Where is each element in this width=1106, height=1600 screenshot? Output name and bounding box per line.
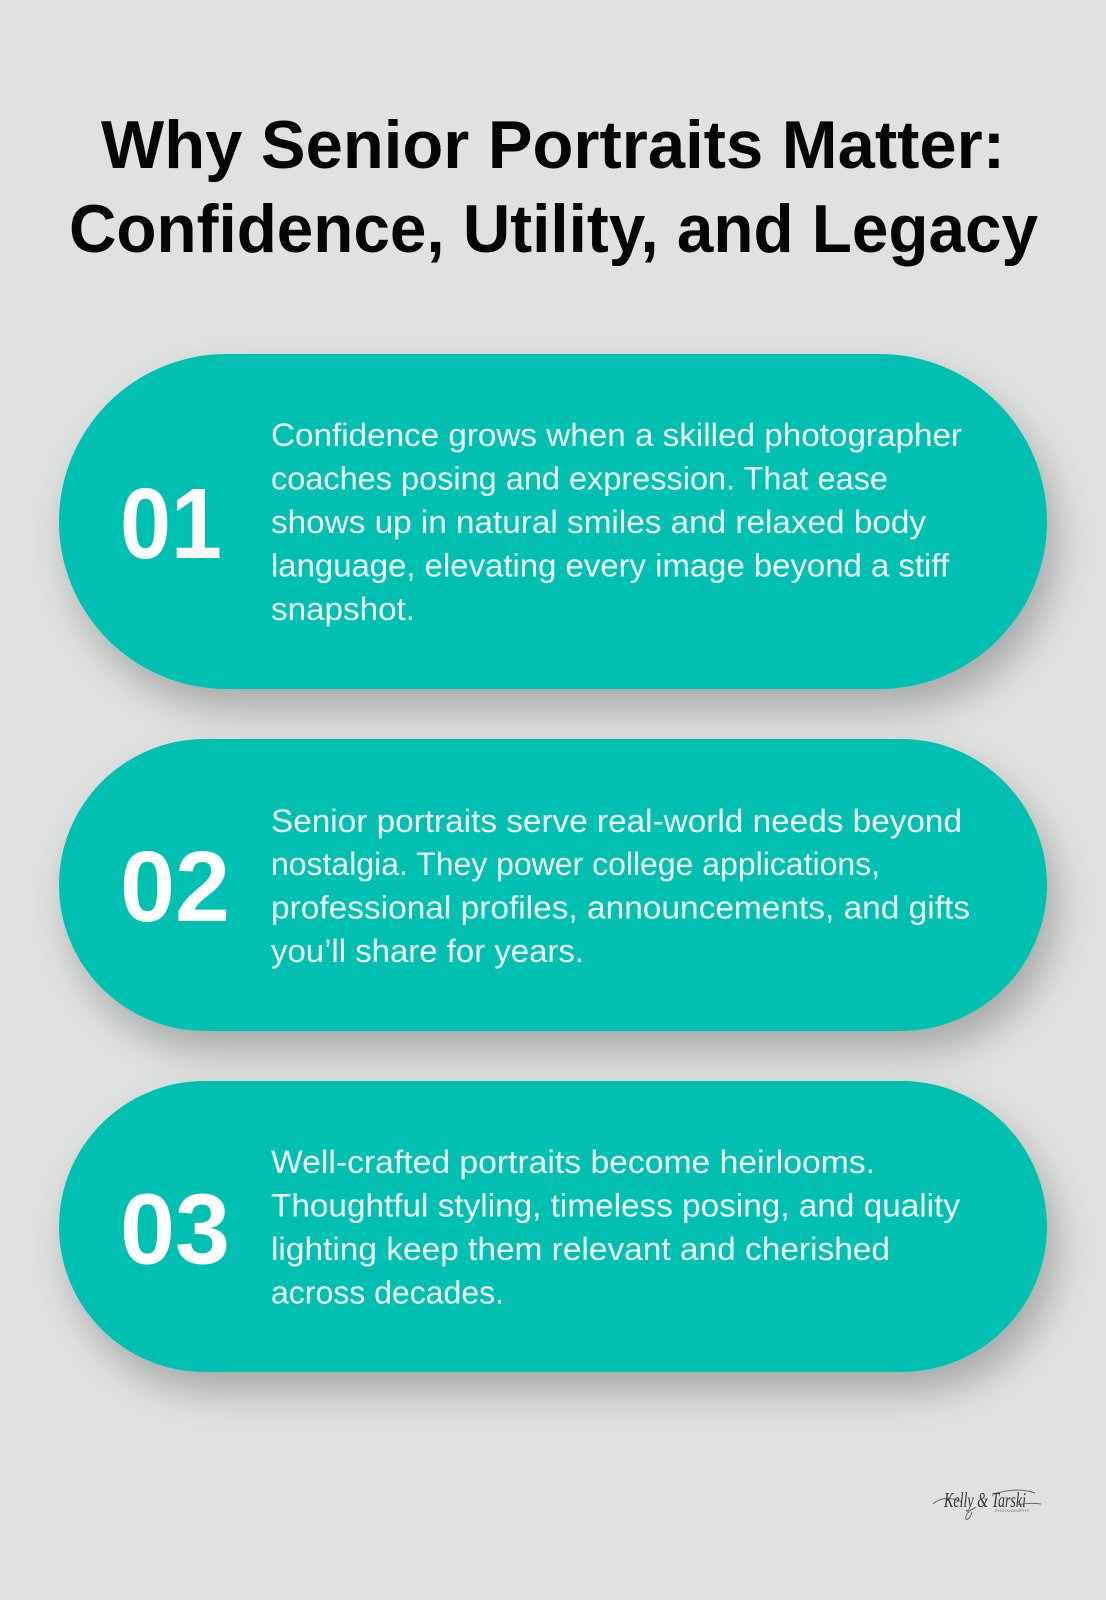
title: Why Senior Portraits Matter: (101, 107, 1005, 183)
text block 03: across decades. (271, 1274, 504, 1310)
text block 01: Confidence grows when a skilled photographer (271, 417, 962, 453)
panel: 03 legacy (59, 1081, 1047, 1372)
text block 02: professional profiles, announcements, and gifts (271, 890, 970, 926)
text block 01: language, elevating every image beyond a stiff (271, 548, 949, 584)
number 01: 01 (120, 468, 222, 580)
title: Confidence, Utility, and Legacy (69, 191, 1038, 267)
text block 02 (271, 803, 970, 969)
text block 03: Thoughtful styling, timeless posing, and quality (271, 1188, 960, 1224)
signature logo: PHOTOGRAPHY (995, 1508, 1029, 1513)
panel: 02 utility (59, 739, 1047, 1031)
text block 01 (271, 417, 962, 627)
text block 03: lighting keep them relevant and cherished (271, 1231, 890, 1267)
text block 02: nostalgia. They power college applications, (271, 846, 880, 882)
panel: 01 confidence (59, 354, 1047, 689)
text block 01: coaches posing and expression. That ease (271, 460, 888, 496)
text block 01: shows up in natural smiles and relaxed body (271, 504, 926, 540)
text block 02: Senior portraits serve real-world needs beyond (271, 803, 962, 839)
text block 03 (271, 1144, 960, 1310)
pill background 02 (59, 739, 1047, 1031)
signature logo (933, 1488, 1041, 1519)
signature logo: Kelly & Tarski (943, 1488, 1026, 1512)
text block 01: snapshot. (271, 591, 415, 627)
number 03: 03 (120, 1174, 230, 1286)
title (69, 107, 1038, 267)
pill background 01 (59, 354, 1047, 689)
text block 02: you’ll share for years. (271, 933, 584, 969)
number 02: 02 (120, 831, 230, 943)
text block 03: Well-crafted portraits become heirlooms. (271, 1144, 875, 1180)
pill background 03 (59, 1081, 1047, 1372)
